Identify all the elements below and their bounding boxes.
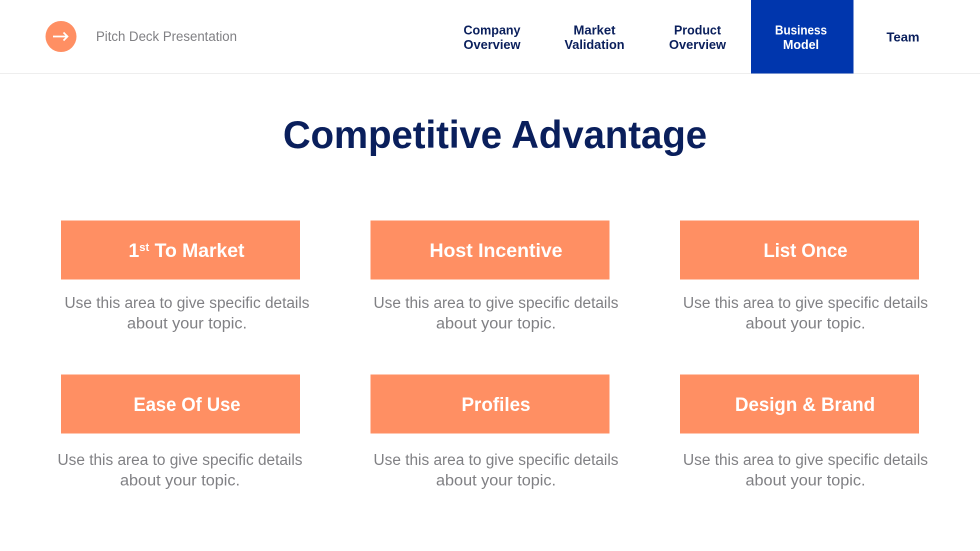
panel: 1st To Market: To Market [149,241,245,262]
panel: 1st To Market: st [139,242,150,254]
nav item: Product Overview: Overview [669,38,726,52]
panel: Ease Of Use [58,374,303,490]
body text: about your topic. [127,316,247,332]
body text: Use this area to give specific details [58,452,303,469]
panel: Profiles: Profiles [462,395,530,416]
nav item active: Business Model [751,0,854,74]
panel: Profiles [370,374,619,490]
panel: Host Incentive: Host Incentive [430,241,562,262]
nav item: Market Validation: Market [574,24,616,38]
panel: List Once [680,220,928,332]
body text: Use this area to give specific details [64,295,310,312]
panel: 1st To Market [61,220,310,332]
panel: 1st To Market: 1 [128,241,139,262]
navigation bar [464,0,920,74]
deck label: Pitch Deck Presentation [96,29,237,44]
body text: about your topic. [746,472,866,490]
body text: about your topic. [436,472,556,490]
body text: about your topic. [120,472,240,490]
nav item: Market Validation: Validation [564,38,624,52]
icon: arrow badge [46,21,76,52]
nav item active: Business Model: Model [783,38,819,52]
nav item: Company Overview: Company [464,24,521,38]
body text: Use this area to give specific details [683,452,928,469]
nav item active: Business Model: Business [775,24,827,38]
panel: List Once: List Once [764,241,848,262]
body text: Use this area to give specific details [374,295,619,312]
body text: about your topic. [746,316,866,332]
nav item: Team: Team [886,30,920,44]
nav item: Company Overview: Overview [464,38,521,52]
panel: Host Incentive [370,220,619,332]
body text: Use this area to give specific details [374,452,619,469]
panel: Design & Brand: Design & Brand [735,395,875,416]
body text: about your topic. [436,316,556,332]
panel: Design & Brand [680,374,928,490]
panel: Ease Of Use: Ease Of Use [134,395,240,416]
title: Competitive Advantage [283,114,707,157]
body text: Use this area to give specific details [683,295,928,312]
nav item: Product Overview: Product [674,24,722,38]
